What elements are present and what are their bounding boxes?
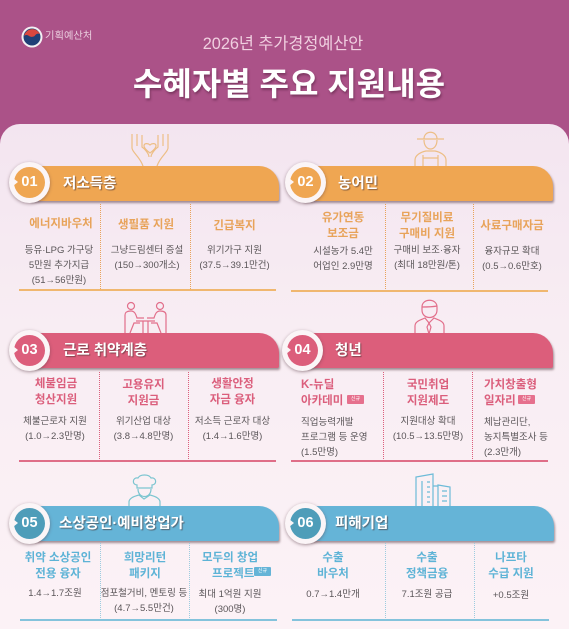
item text: (51→56만원) [32,275,86,286]
dividers [385,543,386,620]
item text: 어업인 2.9만명 [313,261,373,272]
section heading: 저소득층: 저소득층 [63,176,116,192]
item text: 최대 1억원 지원 [198,589,262,600]
number badge 05 [9,503,50,544]
item text: 7.1조원 공급 [402,589,452,600]
section heading: 소상공인·예비창업가: 소상공인·예비창업가 [59,516,184,532]
number badge 05: 05 [21,515,38,531]
bar: 06 header [303,506,554,541]
item: 생필품 지원: 생필품 지원 [118,219,174,231]
item: 가치창출형 일자리: 가치창출형 [484,379,537,391]
icon: two people at table [124,302,167,333]
item text: 융자규모 확대 [484,246,540,257]
item text: 위기산업 대상 [116,416,171,427]
badge: 신규 [254,567,271,576]
item text [101,588,187,614]
icon: farmer [414,132,447,166]
item: 모두의 창업 프로젝트: 모두의 창업 [202,552,258,564]
item: 취약 소상공인 전용 융자: 전용 융자 [35,568,81,580]
item: 취약 소상공인 전용 융자 [25,551,91,580]
item: 무기질비료 구매비 지원 [399,211,455,240]
item text: (2.3만개) [484,447,521,458]
dividers [385,204,386,289]
item text: (3.8→4.8만명) [114,431,173,442]
section 02 [283,161,556,292]
number badge 01: 01 [21,174,38,190]
item text: (1.4→1.6만명) [203,431,262,442]
number badge 02 [285,162,326,203]
item text [199,244,270,271]
item: 수출 바우처: 수출 [322,552,344,564]
item text: (최대 18만원/톤) [394,260,460,271]
item: 희망리턴 패키지: 희망리턴 [124,552,166,564]
item: 수출 정책금융: 수출 [416,552,438,564]
item text [195,416,270,442]
item: 체불임금 청산지원: 체불임금 [35,378,77,390]
item: 수출 바우처: 바우처 [317,568,349,580]
item: K-뉴딜 아카데미 [301,378,343,406]
item: 나프타 수급 지원 [471,551,551,582]
item text [25,244,93,286]
bar: 04 header [300,333,553,368]
item text: (37.5→39.1만건) [199,260,270,271]
item text [23,416,87,442]
item: 무기질비료 구매비 지원: 무기질비료 [401,212,453,224]
title: 수혜자별 주요 지원내용 [133,66,445,102]
item: 수출 바우처 [317,551,349,580]
item: 고용유지 지원금 [122,378,165,406]
item: 취약 소상공인 전용 융자: 취약 소상공인 [25,552,91,564]
item: 유가연동 보조금: 보조금 [327,228,359,240]
dividers [100,204,101,289]
number badge 02: 02 [297,174,314,190]
item text: (1.0→2.3만명) [25,431,85,442]
item text: 체납관리단, [484,417,530,428]
badge: 신규 [347,395,364,404]
item: 가치창출형 일자리: 일자리 [484,394,516,406]
item text: (0.5→0.6만호) [482,261,542,272]
item text [482,246,542,272]
item text: 시설농가 5.4만 [313,246,373,257]
item: 체불임금 청산지원: 청산지원 [35,394,77,406]
section heading: 근로 취약계층: 근로 취약계층 [63,343,147,359]
item: K-뉴딜 아카데미: 아카데미 [301,394,343,406]
item text: 지원대상 확대 [400,416,456,427]
section heading: 피해기업: 피해기업 [335,516,388,532]
section 01 [7,161,282,291]
number badge 01 [9,162,50,203]
item text: 점포철거비, 멘토링 등 [101,588,187,599]
item: 생활안정 자금 융자 [210,377,255,406]
item text [394,244,460,271]
item: K-뉴딜 아카데미: K-뉴딜 [301,379,334,391]
item: 긴급복지: 긴급복지 [213,220,256,232]
badge: 신규: 신규 [522,396,531,402]
item text: 체불근로자 지원 [23,416,87,427]
item text: 저소득 근로자 대상 [195,416,270,427]
number badge 06 [285,503,326,544]
item text [114,416,173,442]
item: 희망리턴 패키지 [124,551,166,580]
number badge 04: 04 [294,342,311,358]
number badge 03: 03 [21,342,38,358]
header logo: 기획예산처 [45,31,92,42]
dividers [100,543,101,620]
item: 수출 정책금융: 정책금융 [406,568,448,580]
item: 수출 정책금융 [406,551,448,580]
item text: 농지특별조사 등 [484,432,548,443]
bar: 03 header [30,333,279,368]
dividers [383,372,384,459]
item text: 프로그램 등 운영 [301,432,367,443]
item text: 1.4→1.7조원 [28,588,82,599]
section 04 [280,329,556,462]
item: 유가연동 보조금 [322,211,364,240]
bar: 02 header [303,166,553,201]
bar: 01 header [30,166,279,201]
item: 생활안정 자금 융자: 자금 융자 [210,394,255,406]
item: 사료구매자금: 사료구매자금 [480,220,544,232]
item text: (1.5만명) [301,447,338,458]
item: 국민취업 지원제도 [407,378,449,406]
badge: 신규 [518,395,535,404]
badge: 신규: 신규 [351,396,360,402]
item text: (10.5→13.5만명) [393,431,463,442]
item: 모두의 창업 프로젝트: 프로젝트 [212,568,254,580]
item: 에너지바우처: 에너지바우처 [29,218,93,230]
item: 모두의 창업 프로젝트 [202,551,258,580]
item text [198,588,262,615]
item text: (4.7→5.5만건) [114,603,174,614]
number badge 06: 06 [297,515,314,531]
item text: 등유·LPG 가구당 [25,245,93,256]
item text [301,416,367,458]
item text [111,244,183,271]
header logo [22,26,92,48]
bar: 05 header [30,506,279,541]
section heading: 농어민: 농어민 [338,176,378,192]
item: 체불임금 청산지원 [35,377,77,406]
item text: 그냥드림센터 증설 [111,245,183,256]
item text: 구매비 보조·융자 [394,245,460,256]
item text [313,246,373,272]
item: 가치창출형 일자리 [484,378,537,406]
icon: chef [128,474,161,506]
item: 나프타 수급 지원: 수급 지원 [488,568,534,580]
item: 고용유지 지원금: 고용유지 [122,379,165,391]
item: 유가연동 보조금: 유가연동 [322,212,364,224]
number badge 03 [9,330,50,371]
badge: 신규: 신규 [258,568,267,574]
item text: 직업능력개발 [301,417,353,428]
item: 희망리턴 패키지: 패키지 [129,568,161,580]
item: 나프타 수급 지원: 나프타 [495,552,527,564]
number badge 04 [282,330,323,371]
item: 생활안정 자금 융자: 생활안정 [211,378,254,390]
item text: 위기가구 지원 [207,245,262,256]
item text: 5만원 추가지급 [29,260,89,271]
item: 무기질비료 구매비 지원: 구매비 지원 [399,228,455,240]
item text [393,416,463,442]
icon: young man in suit [414,300,445,333]
item: 국민취업 지원제도: 국민취업 [407,379,449,391]
section 03 [7,329,282,462]
item: 국민취업 지원제도: 지원제도 [407,394,449,406]
subtitle: 2026년 추가경정예산안 [203,35,363,53]
item text [484,416,548,458]
section 05 [7,502,282,621]
section 06 [283,502,556,621]
dividers [99,372,100,459]
icon: hands holding heart [131,134,169,166]
item: 고용유지 지원금: 지원금 [128,394,159,406]
item text: (150→300개소) [114,260,180,271]
item text: 0.7→1.4만개 [306,589,360,600]
icon: office buildings [415,473,451,506]
item text: +0.5조원 [493,590,529,601]
item text: (300명) [215,604,245,615]
section heading: 청년: 청년 [335,343,362,359]
